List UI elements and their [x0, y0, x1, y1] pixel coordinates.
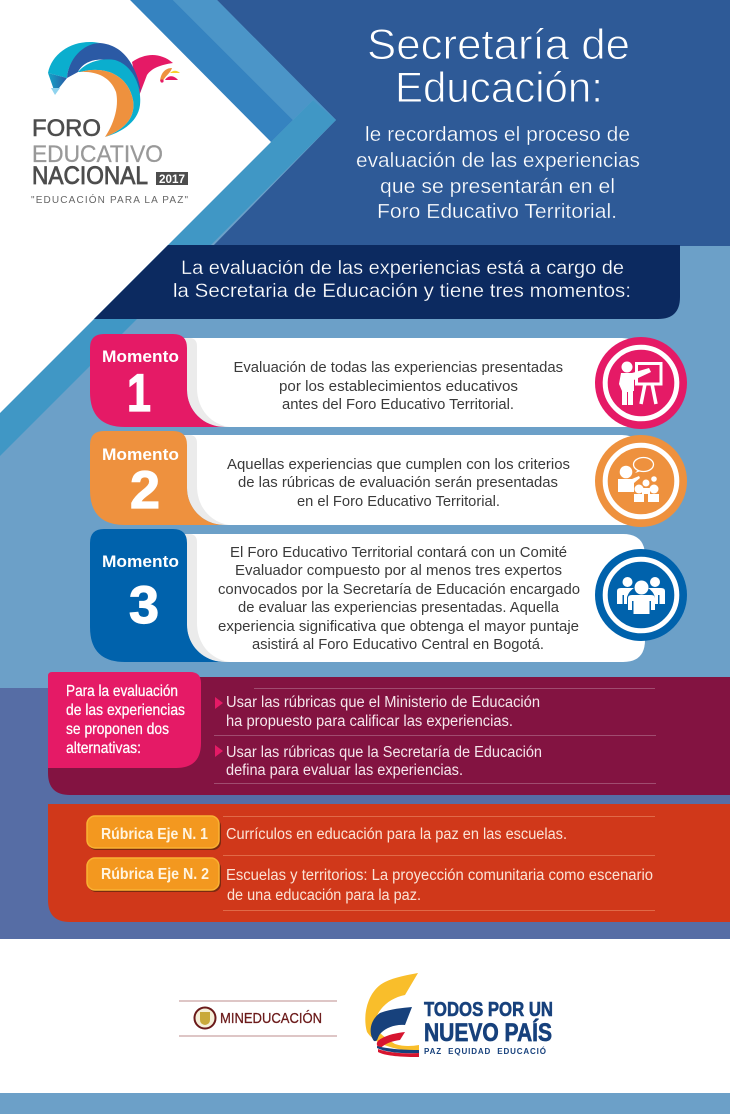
logo slogan: "EDUCACIÓN PARA LA PAZ" [31, 193, 188, 206]
title: Secretaría de [367, 21, 630, 69]
chevron band: medium blue [130, 0, 293, 142]
momento 1 text: Evaluación de todas las experiencias presentadas [234, 359, 563, 376]
alternative 2: defina para evaluar las experiencias. [226, 762, 463, 779]
momento 3 text: experiencia significativa que obtenga el mayor puntaje [218, 618, 579, 635]
pink callout: se proponen dos [66, 721, 169, 738]
momento 3 number: 3 [129, 576, 159, 635]
panel: momento 2 [90, 431, 687, 527]
rubrica 2 button: Rúbrica Eje N. 2 [101, 866, 209, 883]
pink callout: de las experiencias [66, 702, 185, 719]
logo year badge: 2017 [159, 172, 185, 186]
rubrica 1 button [87, 816, 221, 850]
panel: momento 1 [90, 334, 687, 429]
momento 3 text: asistirá al Foro Educativo Central en Bogotá. [252, 636, 544, 653]
icon: presenter at board [595, 337, 687, 429]
title [367, 21, 630, 112]
diagonal band: teal blue [0, 100, 336, 456]
subtitle: le recordamos el proceso de [365, 124, 630, 146]
rubrica 2 text: Escuelas y territorios: La proyección comunitaria como escenario [226, 867, 653, 884]
logo: Mineducación: MINEDUCACIÓN [220, 1010, 322, 1027]
subtitle: que se presentarán en el [380, 176, 615, 198]
banner text: La evaluación de las experiencias está a cargo de [181, 258, 624, 279]
alternative 1: ha propuesto para calificar las experiencias. [226, 713, 513, 730]
logo text: EDUCATIVO: EDUCATIVO [32, 141, 163, 168]
pink callout: alternativas: [66, 740, 141, 757]
rubrica 2 text: de una educación para la paz. [227, 887, 421, 904]
momento 3 text: convocados por la Secretaría de Educación encargado [218, 581, 580, 598]
logo: Todos por un nuevo país: PAZ EQUIDAD EDUCACIÓ [424, 1047, 546, 1056]
momento 2 label: Momento [102, 445, 179, 464]
panel: alternativas [48, 672, 730, 795]
logo text: NACIONAL: NACIONAL [32, 162, 148, 190]
momento 2 number: 2 [130, 461, 160, 520]
alternative 1: Usar las rúbricas que el Ministerio de Educación [226, 694, 540, 711]
rubrica 2 button [87, 858, 221, 892]
logo: Mineducación [179, 1001, 337, 1036]
pink callout: Para la evaluación [66, 683, 178, 700]
momento 3 label: Momento [102, 552, 179, 571]
momento 3 text [218, 544, 580, 653]
momento 3 text: El Foro Educativo Territorial contará con un Comité [230, 544, 567, 561]
background: lower indigo [0, 688, 730, 939]
tricolor mark [365, 973, 419, 1057]
rubrica 1 button: Rúbrica Eje N. 1 [101, 826, 208, 843]
footer white area [0, 939, 730, 1093]
subtitle [356, 124, 640, 223]
subtitle: Foro Educativo Territorial. [377, 201, 617, 223]
momento 2 text [227, 456, 570, 510]
banner text: la Secretaria de Educación y tiene tres momentos: [173, 281, 631, 302]
logo text: FORO: FORO [32, 115, 101, 142]
white logo panel [0, 0, 271, 413]
momento 1 text: por los establecimientos educativos [279, 378, 518, 395]
seal [194, 1008, 216, 1028]
panel: momento 3 [90, 529, 687, 662]
logo: Todos por un nuevo país: TODOS POR UN [424, 999, 553, 1021]
momento 1 text [234, 359, 563, 413]
icon: speaker and audience [595, 435, 687, 527]
rubrica 1 text: Currículos en educación para la paz en las escuelas. [226, 826, 567, 843]
rubrica 2 text [226, 867, 653, 904]
logo: Todos por un nuevo país [365, 973, 553, 1057]
icon: group of people [595, 549, 687, 641]
momento 2 text: en el Foro Educativo Territorial. [297, 493, 500, 510]
logo: Todos por un nuevo país: NUEVO PAÍS [424, 1018, 552, 1047]
pink callout [48, 672, 201, 768]
momento 1 label: Momento [102, 347, 179, 366]
panel: rubricas [48, 804, 730, 922]
header dark blue panel [213, 0, 730, 246]
logo bird [48, 42, 180, 137]
momento 2 text: de las rúbricas de evaluación serán presentadas [238, 474, 558, 491]
subtitle: evaluación de las experiencias [356, 150, 640, 172]
bottom blue strip [0, 1093, 730, 1114]
momento 1 number: 1 [127, 364, 151, 423]
alternative 1 [215, 694, 540, 730]
banner text [173, 258, 631, 302]
chevron band: light blue [173, 0, 336, 120]
momento 2 text: Aquellas experiencias que cumplen con los criterios [227, 456, 570, 473]
navy banner [94, 245, 680, 319]
momento 3 text: de evaluar las experiencias presentadas. Aquella [238, 599, 560, 616]
title: Educación: [395, 64, 603, 112]
momento 1 text: antes del Foro Educativo Territorial. [282, 396, 514, 413]
alternative 2 [215, 744, 542, 779]
logo: Foro Educativo Nacional [31, 42, 188, 206]
momento 3 text: Evaluador compuesto por al menos tres expertos [235, 562, 562, 579]
background: light blue [0, 0, 730, 689]
alternative 2: Usar las rúbricas que la Secretaría de Educación [226, 744, 542, 761]
